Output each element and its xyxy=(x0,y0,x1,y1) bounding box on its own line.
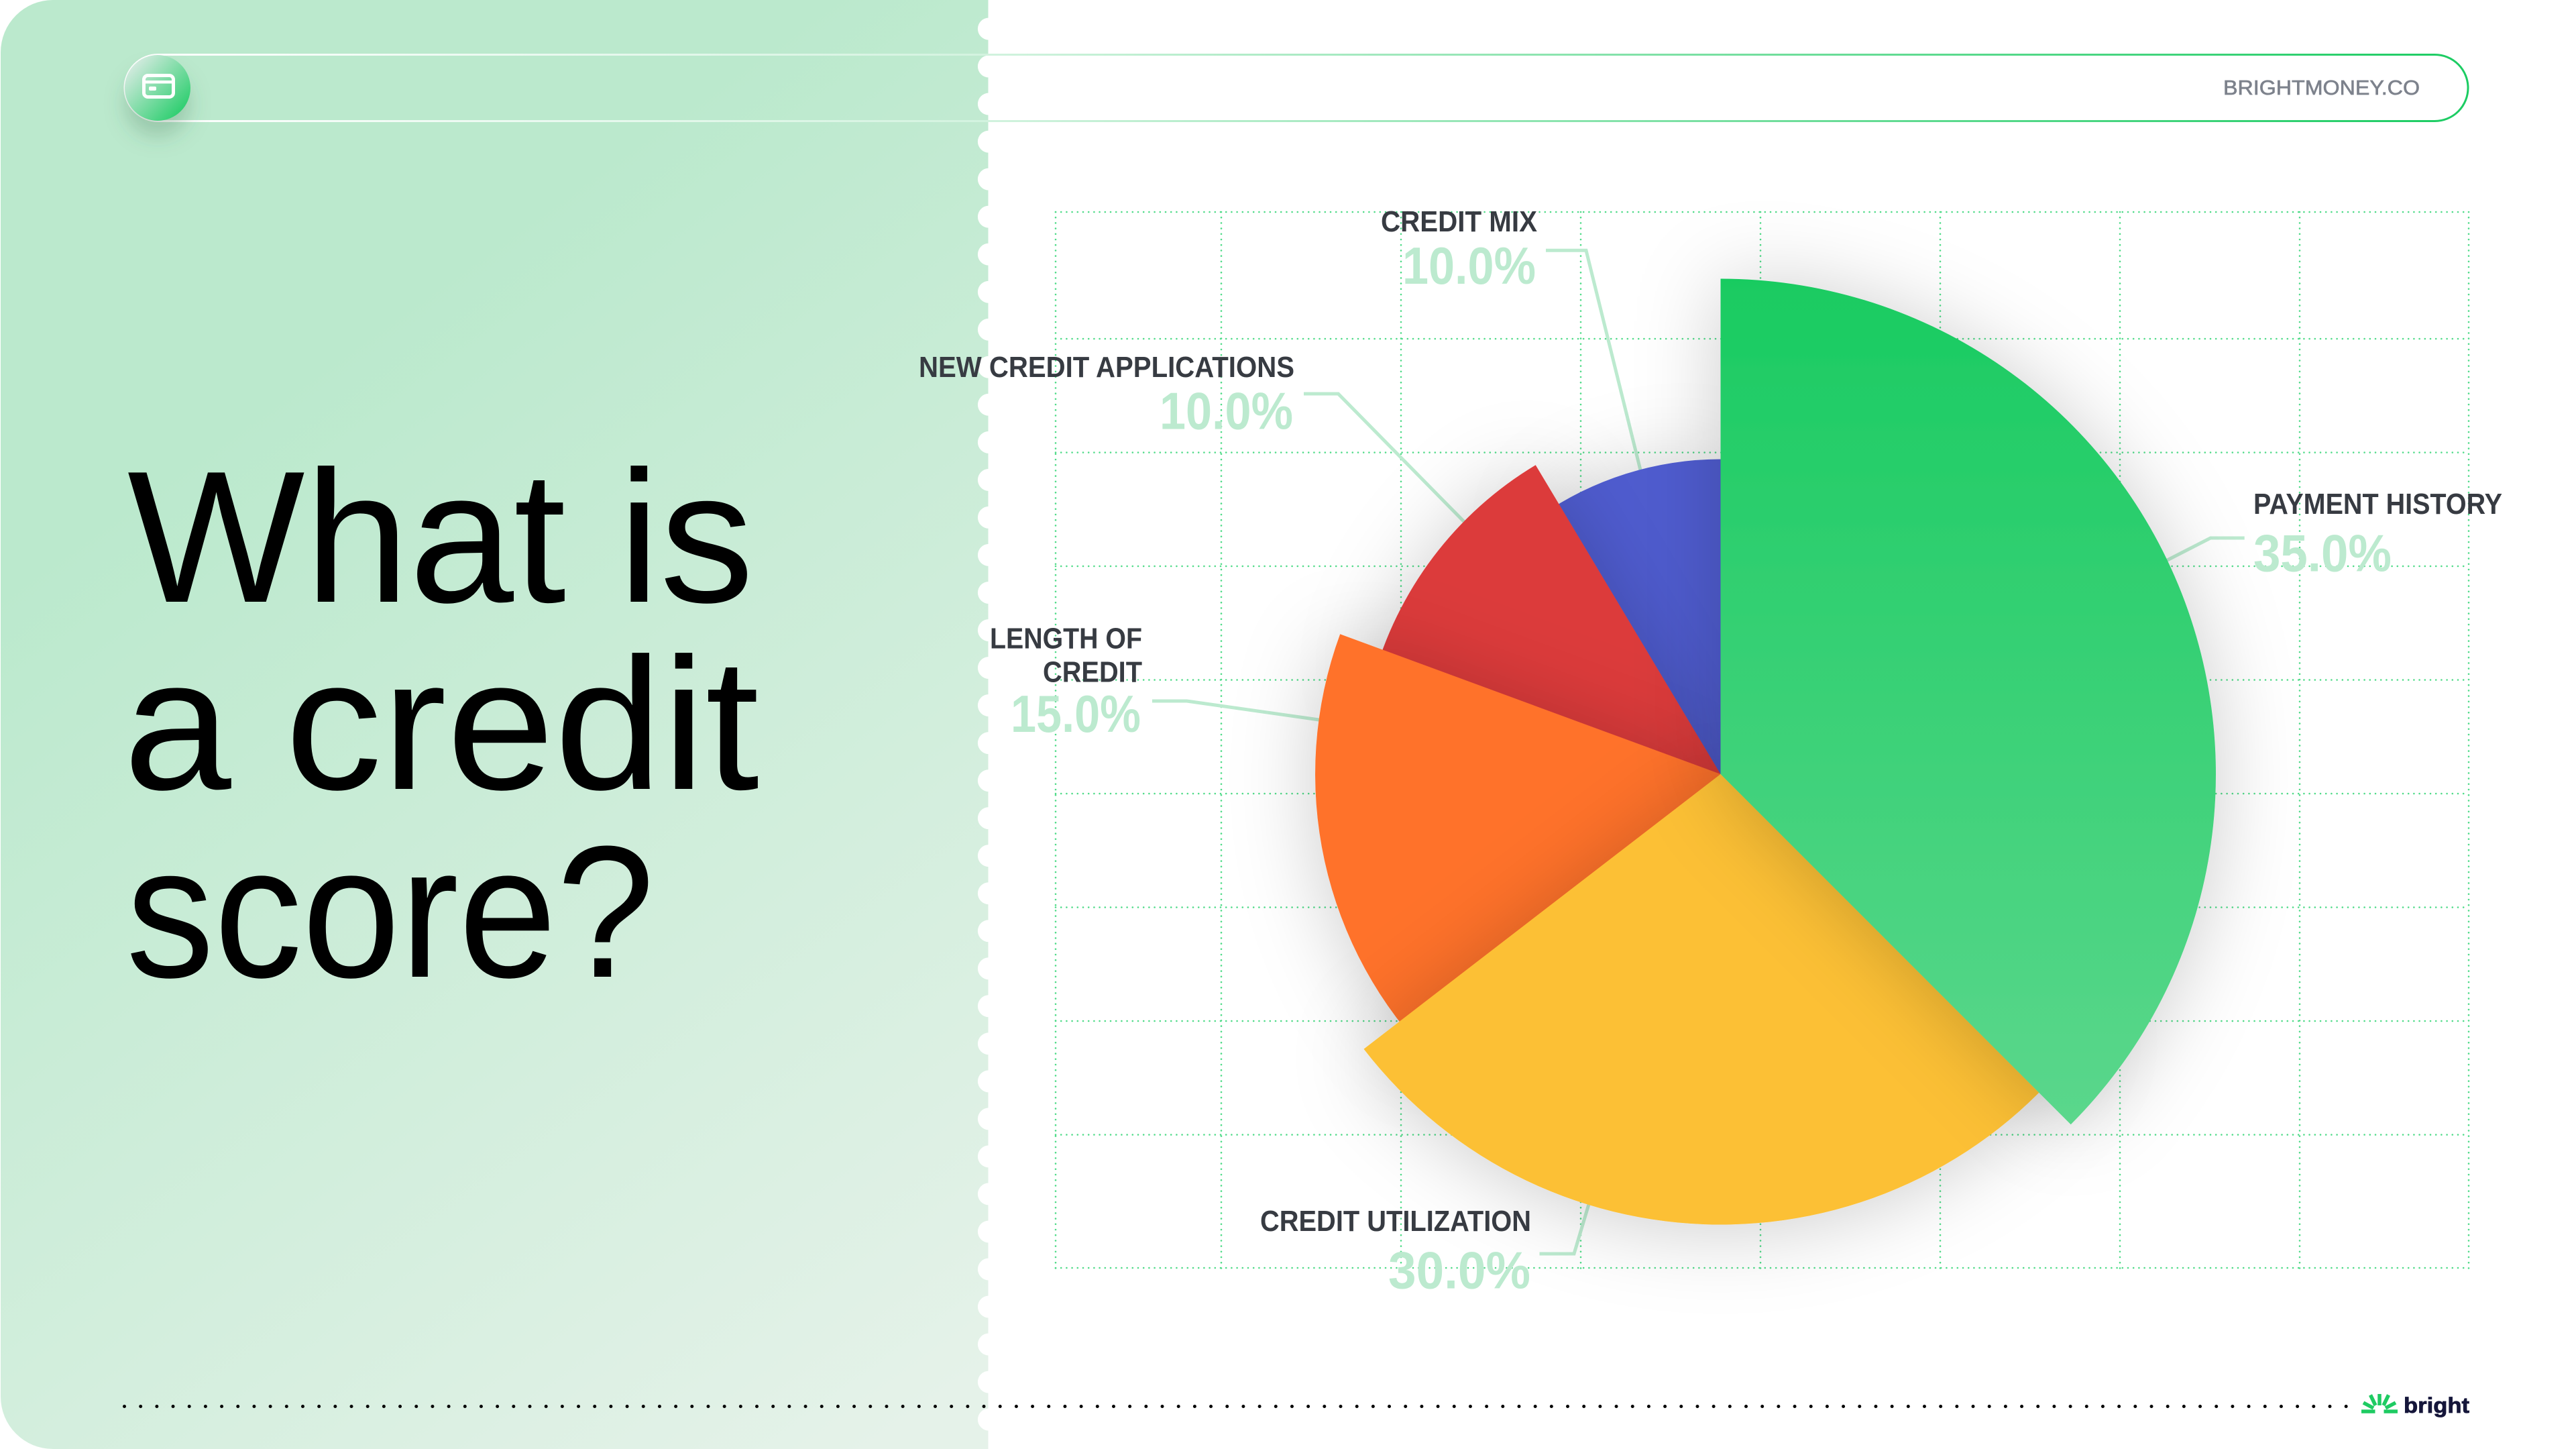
website label: BRIGHTMONEY.CO xyxy=(2223,76,2420,99)
panel: left green background xyxy=(1,0,989,1449)
title: a credit xyxy=(123,620,760,829)
title xyxy=(123,433,760,1017)
label: credit utilization xyxy=(1260,1205,1531,1300)
label: credit mix: 10.0% xyxy=(1402,236,1536,295)
label: length of credit xyxy=(990,623,1142,743)
label: credit utilization: CREDIT UTILIZATION xyxy=(1260,1205,1531,1238)
label: credit utilization: 30.0% xyxy=(1388,1241,1530,1300)
grid: dotted chart background xyxy=(1056,212,2469,1269)
slice: payment history xyxy=(1721,279,2216,1124)
slice: new credit applications xyxy=(1373,465,1721,774)
footer dotted line xyxy=(125,1405,2347,1408)
label: length of credit: 15.0% xyxy=(1011,684,1141,743)
label: new credit applications: 10.0% xyxy=(1160,381,1293,440)
pie chart xyxy=(1315,279,2216,1225)
logo: bright xyxy=(2361,1393,2469,1417)
label: payment history: PAYMENT HISTORY xyxy=(2253,488,2502,521)
icon: sun rays xyxy=(2361,1394,2398,1411)
label: new credit applications xyxy=(919,351,1294,440)
header pill xyxy=(125,55,2468,121)
wordmark: bright xyxy=(2404,1393,2469,1417)
button: card icon xyxy=(125,55,190,121)
title: What is xyxy=(127,433,754,642)
leader lines xyxy=(1152,250,2245,1254)
title: score? xyxy=(126,808,655,1017)
label: payment history: 35.0% xyxy=(2253,523,2392,582)
label: payment history xyxy=(2253,488,2502,582)
label: credit mix xyxy=(1381,205,1537,295)
label: new credit applications: NEW CREDIT APPLICATIONS xyxy=(919,351,1294,384)
label: credit mix: CREDIT MIX xyxy=(1381,205,1537,238)
label: length of credit: LENGTH OF xyxy=(990,623,1142,655)
slice: length of credit xyxy=(1315,634,1721,1061)
slice: credit utilization xyxy=(1364,774,2090,1225)
label: length of credit: CREDIT xyxy=(1043,656,1142,688)
slice: credit mix xyxy=(1540,459,1721,774)
